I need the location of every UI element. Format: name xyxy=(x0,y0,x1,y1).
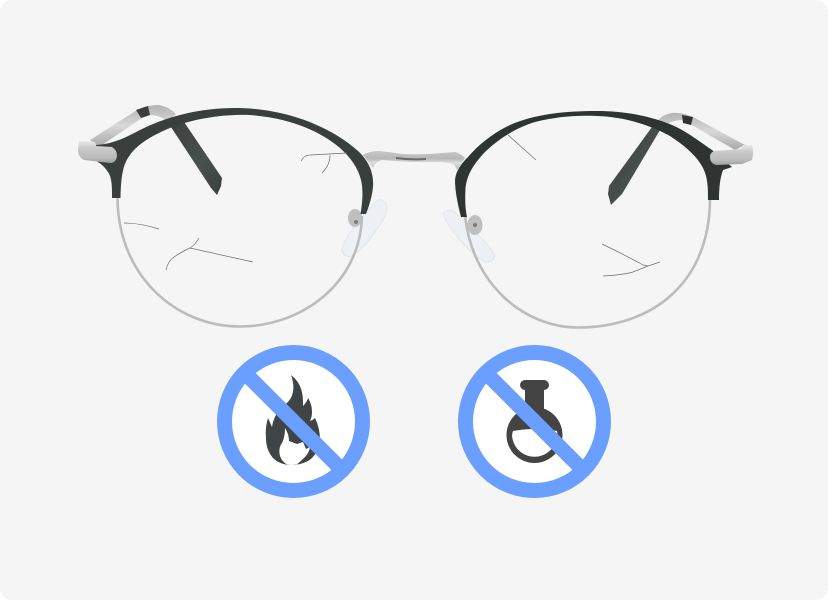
flask xyxy=(506,380,562,463)
slash xyxy=(244,372,343,471)
bridge xyxy=(363,151,465,170)
icon: no fire xyxy=(224,352,362,490)
glasses xyxy=(78,105,753,328)
flame xyxy=(266,375,320,465)
right temple arm xyxy=(608,113,745,205)
left lens upper rim xyxy=(96,108,373,214)
left lens lower rim xyxy=(118,198,362,326)
right lens upper rim xyxy=(455,111,732,217)
left temple arm xyxy=(90,105,222,195)
right lens lower rim xyxy=(465,198,710,328)
slash xyxy=(485,372,584,471)
left hinge xyxy=(78,141,117,163)
right lens cracks xyxy=(508,135,660,276)
right nose pad xyxy=(443,210,495,262)
right hinge xyxy=(710,145,753,165)
icon: no chemicals xyxy=(466,352,604,490)
left lens cracks xyxy=(124,153,347,270)
left nose pad xyxy=(342,200,387,257)
